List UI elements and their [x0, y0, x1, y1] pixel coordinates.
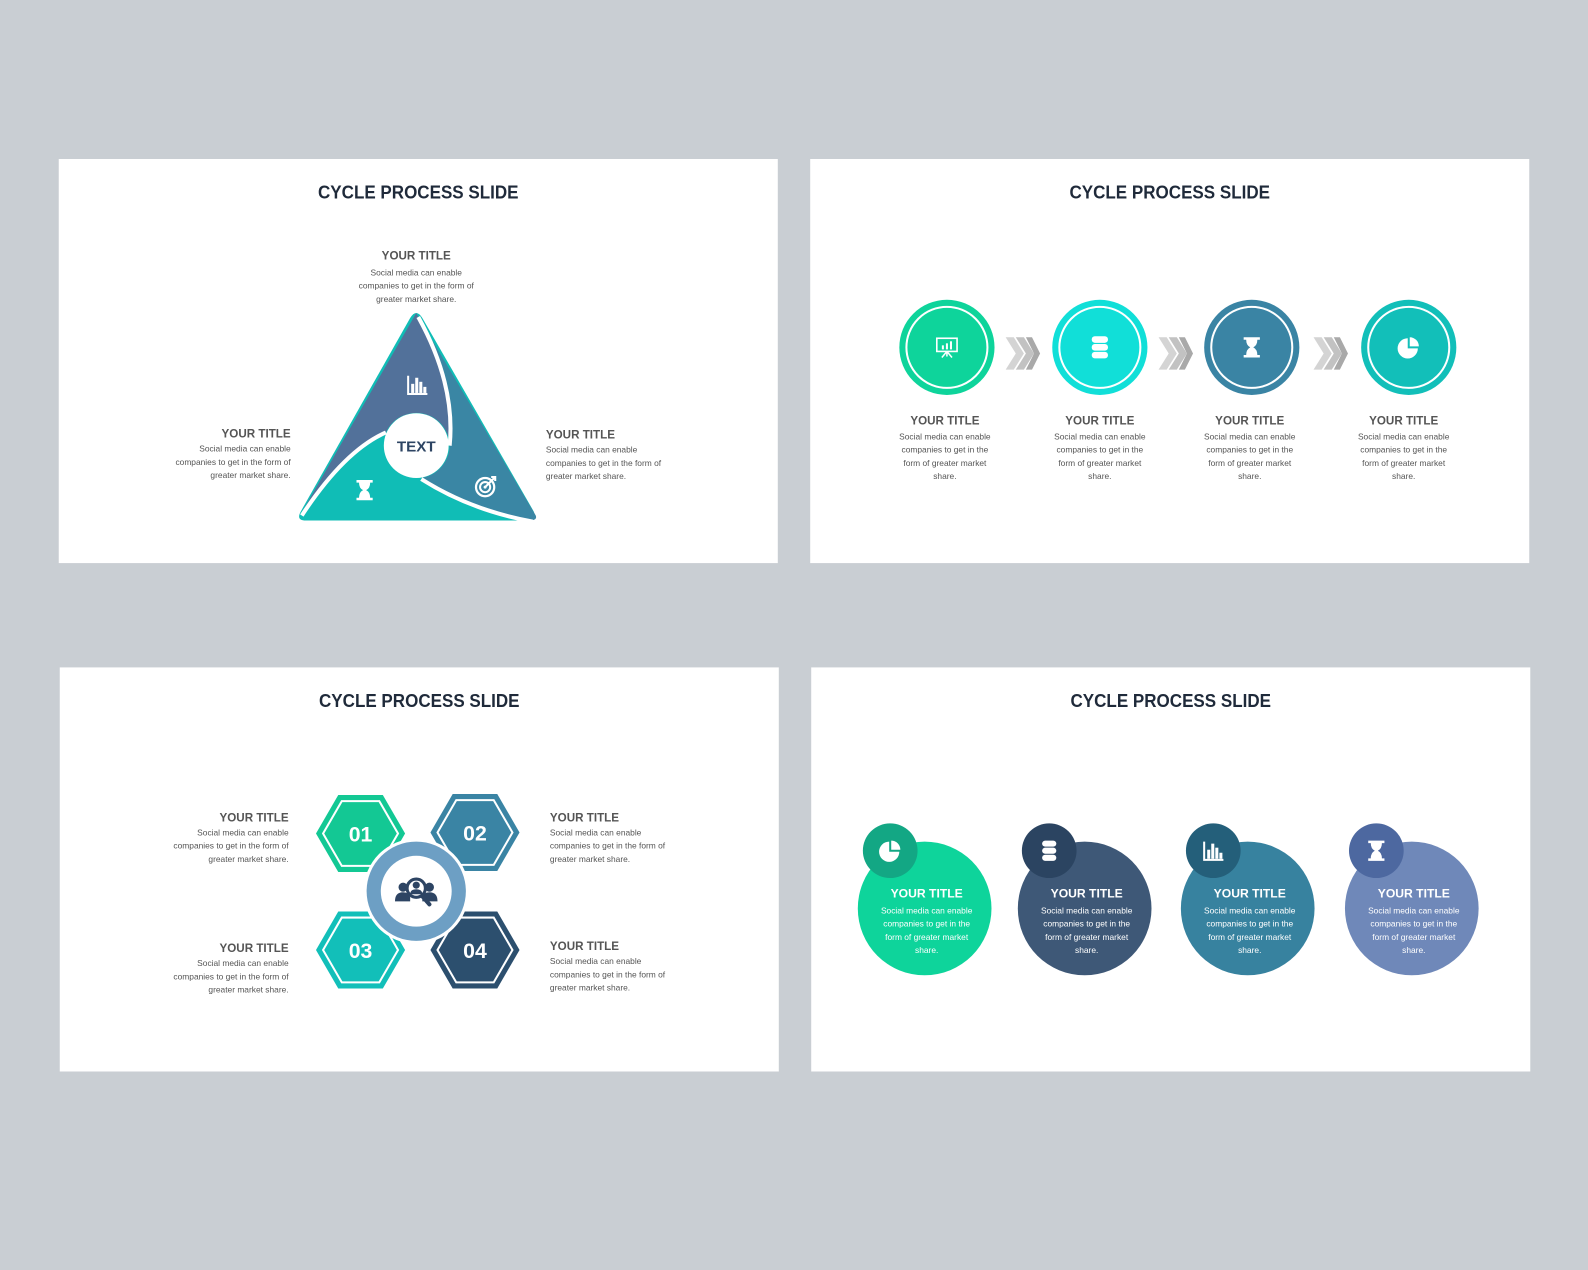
circle 4: Social media can enable — [1368, 906, 1460, 916]
text blocks: hexagon labels: companies to get in the form of — [550, 841, 666, 851]
arrow: chevrons 1 — [1006, 337, 1040, 370]
title: CYCLE PROCESS SLIDE — [319, 691, 520, 711]
circle 1: share. — [915, 945, 938, 955]
hexagon 04 — [430, 911, 520, 988]
icon: presentation — [937, 338, 957, 358]
text blocks: steps: Social media can enable — [1204, 432, 1296, 442]
title: CYCLE PROCESS SLIDE — [1070, 691, 1271, 711]
text blocks: steps: Social media can enable — [899, 432, 991, 442]
text blocks: steps: companies to get in the — [1056, 445, 1144, 455]
circle 4: companies to get in the — [1370, 919, 1458, 929]
icon: hourglass — [356, 480, 373, 500]
text blocks: steps: YOUR TITLE — [1215, 414, 1285, 427]
text blocks: steps: share. — [1238, 471, 1261, 481]
text blocks: steps: YOUR TITLE — [1065, 414, 1135, 427]
circle 2: YOUR TITLE — [1051, 886, 1123, 900]
text block: right — [546, 429, 662, 481]
text blocks: hexagon labels — [173, 811, 666, 995]
center label: TEXT — [397, 439, 436, 456]
text block: top: companies to get in the form of — [359, 281, 475, 291]
panel: four-step circles with chevrons — [810, 159, 1529, 563]
circle 4: form of greater market — [1372, 932, 1456, 942]
text blocks: steps: form of greater market — [903, 458, 987, 468]
text block: top — [359, 249, 475, 304]
circle 1: companies to get in the — [883, 919, 970, 929]
hexagon 03 — [316, 911, 405, 988]
circle 1: form of greater market — [885, 932, 969, 942]
text blocks: hexagon labels: greater market share. — [550, 982, 630, 992]
text blocks: hexagon labels: Social media can enable — [550, 828, 642, 838]
text block: left: Social media can enable — [199, 444, 291, 454]
text block: left: greater market share. — [210, 470, 291, 480]
circle 3: companies to get in the — [1206, 919, 1293, 929]
text block: right: companies to get in the form of — [546, 458, 662, 468]
text blocks: steps — [899, 414, 1450, 481]
panel: big circles — [811, 667, 1530, 1071]
text blocks: steps: Social media can enable — [1358, 432, 1450, 442]
text blocks: steps: share. — [1392, 471, 1415, 481]
circle 4 — [1345, 823, 1479, 975]
circle 2: share. — [1075, 945, 1098, 955]
hexagon 01 — [316, 795, 405, 872]
text block: right: Social media can enable — [546, 445, 638, 455]
text blocks: hexagon labels: greater market share. — [208, 985, 289, 995]
circle 4: share. — [1402, 945, 1425, 955]
text blocks: steps: companies to get in the — [902, 445, 989, 455]
step 4 circle — [1361, 300, 1456, 395]
text block: right: YOUR TITLE — [546, 429, 615, 442]
circle 1: YOUR TITLE — [891, 886, 963, 900]
step 3 circle — [1204, 300, 1299, 395]
icon: database — [1092, 336, 1108, 358]
text blocks: hexagon labels: YOUR TITLE — [550, 940, 619, 953]
text block: top: Social media can enable — [371, 267, 462, 277]
icon: hourglass — [1244, 337, 1260, 358]
text blocks: hexagon labels: greater market share. — [550, 854, 630, 864]
text blocks: hexagon labels: companies to get in the form of — [173, 971, 289, 981]
triangle diagram — [299, 313, 536, 522]
circle 3 — [1181, 823, 1315, 975]
text blocks: steps: share. — [933, 471, 957, 481]
text block: left: YOUR TITLE — [222, 428, 291, 441]
text blocks: hexagon labels: companies to get in the form of — [173, 841, 289, 851]
text blocks: hexagon labels: Social media can enable — [197, 828, 289, 838]
title: CYCLE PROCESS SLIDE — [318, 183, 519, 203]
icon: pie chart — [1398, 337, 1419, 359]
circle 3: Social media can enable — [1204, 906, 1296, 916]
text block: right: greater market share. — [546, 471, 626, 481]
text blocks: steps: companies to get in the — [1360, 445, 1447, 455]
text blocks: hexagon labels: YOUR TITLE — [550, 811, 619, 824]
icon: target — [476, 477, 495, 496]
circle 2: companies to get in the — [1043, 919, 1130, 929]
text block: left — [175, 428, 291, 480]
text block: top: greater market share. — [376, 294, 456, 304]
step 1 circle — [899, 300, 995, 395]
text blocks: hexagon labels: Social media can enable — [550, 956, 642, 966]
text blocks: steps: YOUR TITLE — [910, 414, 980, 427]
circle 2: form of greater market — [1045, 932, 1129, 942]
hexagon 02 — [430, 794, 520, 871]
center circle with icon — [364, 839, 469, 944]
text blocks: steps: share. — [1088, 471, 1112, 481]
title: CYCLE PROCESS SLIDE — [1069, 183, 1270, 203]
text blocks: steps: form of greater market — [1362, 458, 1446, 468]
text blocks: hexagon labels: YOUR TITLE — [220, 811, 289, 824]
text block: top: YOUR TITLE — [382, 249, 451, 262]
circle 2 — [1018, 823, 1152, 975]
circle 1: Social media can enable — [881, 906, 973, 916]
text blocks: hexagon labels: greater market share. — [208, 854, 289, 864]
icon: people search — [395, 878, 438, 904]
text blocks: hexagon labels: companies to get in the form of — [550, 969, 666, 979]
hexagon 04: 04 — [463, 939, 487, 963]
circle 4: YOUR TITLE — [1378, 886, 1450, 900]
circle 3: share. — [1238, 945, 1261, 955]
text blocks: hexagon labels: Social media can enable — [197, 958, 289, 968]
circle 3: YOUR TITLE — [1214, 886, 1286, 900]
circle 3: form of greater market — [1208, 932, 1292, 942]
arrow: chevrons 3 — [1314, 337, 1348, 370]
text blocks: steps: Social media can enable — [1054, 432, 1146, 442]
text blocks: steps: companies to get in the — [1206, 445, 1293, 455]
text blocks: steps: form of greater market — [1208, 458, 1292, 468]
step 2 circle — [1052, 300, 1147, 395]
text blocks: hexagon labels: YOUR TITLE — [220, 942, 289, 955]
text blocks: steps: form of greater market — [1058, 458, 1142, 468]
icon: bar chart — [408, 376, 427, 394]
panel: triangle cycle — [59, 159, 778, 563]
text block: left: companies to get in the form of — [175, 457, 291, 467]
panel: hexagons — [60, 667, 779, 1071]
hexagon 01: 01 — [349, 823, 373, 847]
circle 2: Social media can enable — [1041, 906, 1133, 916]
arrow: chevrons 2 — [1159, 337, 1193, 370]
circle 1 — [858, 823, 991, 975]
hexagon 03: 03 — [349, 939, 373, 963]
text blocks: steps: YOUR TITLE — [1369, 414, 1438, 427]
hexagon 02: 02 — [463, 822, 487, 846]
